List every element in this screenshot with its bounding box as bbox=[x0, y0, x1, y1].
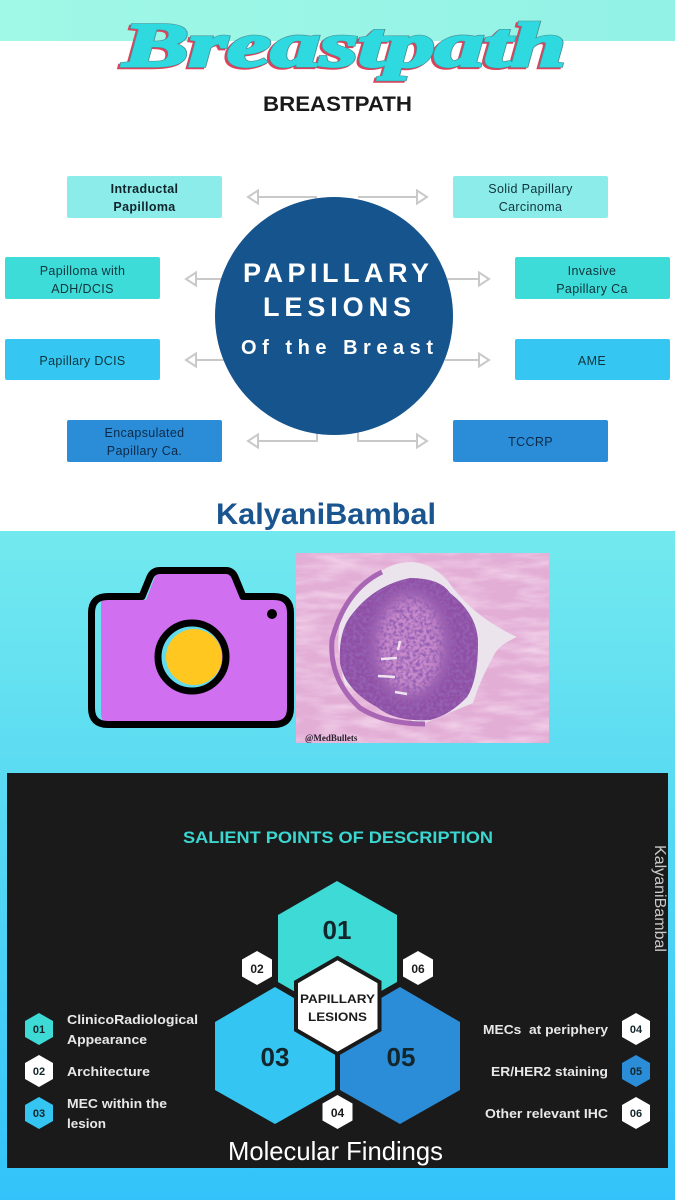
legend item 06: Other relevant IHC bbox=[485, 1106, 609, 1121]
legend item 03: MEC within the bbox=[67, 1096, 167, 1111]
legend item 04 bbox=[483, 1013, 650, 1045]
legend item 06: 06 bbox=[630, 1108, 642, 1120]
legend item 01: ClinicoRadiological bbox=[67, 1012, 198, 1027]
icon: camera bbox=[92, 570, 291, 725]
small hexagon 04 bbox=[322, 1095, 352, 1129]
legend left bbox=[25, 1012, 198, 1131]
small hexagon 06: 06 bbox=[411, 962, 425, 976]
subtitle: BREASTPATH bbox=[263, 93, 412, 116]
legend item 04: MECs at periphery bbox=[483, 1022, 609, 1037]
image credit: @MedBullets bbox=[305, 733, 358, 743]
hexagon 01: 01 bbox=[323, 915, 351, 945]
tumour bbox=[340, 578, 478, 720]
legend item 03: lesion bbox=[67, 1116, 106, 1131]
central circle: LESIONS bbox=[263, 292, 411, 322]
title: Breastpath script logo: Breastpath bbox=[122, 12, 566, 80]
box: Encapsulated Papillary Ca.: Encapsulated bbox=[105, 426, 184, 440]
title: Breastpath script logo: Breastpath bbox=[120, 13, 564, 82]
legend item 01 bbox=[25, 1012, 198, 1047]
hexagon 05: 05 bbox=[387, 1042, 415, 1072]
author name: KalyaniBambal bbox=[216, 498, 436, 531]
central circle: PAPILLARY bbox=[243, 258, 429, 288]
legend right bbox=[483, 1013, 650, 1129]
box: Invasive Papillary Ca bbox=[515, 257, 670, 299]
box: Solid Papillary Carcinoma bbox=[453, 176, 608, 218]
molecular findings caption: Molecular Findings bbox=[228, 1136, 443, 1166]
center hexagon: PAPILLARY bbox=[300, 992, 375, 1006]
diagram: papillary lesions bbox=[5, 176, 670, 462]
box: Intraductal Papilloma: Papilloma bbox=[113, 200, 176, 214]
box: Encapsulated Papillary Ca.: Papillary Ca. bbox=[107, 444, 182, 458]
central circle bbox=[215, 197, 453, 435]
center hexagon: LESIONS bbox=[308, 1010, 367, 1024]
histology image bbox=[296, 553, 549, 743]
box: Intraductal Papilloma: Intraductal bbox=[111, 182, 178, 196]
box: Invasive Papillary Ca: Invasive bbox=[568, 264, 616, 278]
legend item 04: 04 bbox=[630, 1024, 643, 1036]
legend item 05 bbox=[491, 1055, 650, 1087]
box: TCCRP bbox=[453, 420, 608, 462]
box: TCCRP: TCCRP bbox=[508, 435, 553, 449]
central circle: Of the Breast bbox=[241, 337, 433, 359]
box: Solid Papillary Carcinoma: Carcinoma bbox=[499, 200, 562, 214]
vertical author label: KalyaniBambal bbox=[651, 845, 668, 952]
box: Papilloma with ADH/DCIS: ADH/DCIS bbox=[51, 282, 114, 296]
legend item 01: Appearance bbox=[67, 1032, 147, 1047]
hexagon 05 bbox=[340, 987, 460, 1124]
box: Papilloma with ADH/DCIS bbox=[5, 257, 160, 299]
box: Papillary DCIS bbox=[5, 339, 160, 380]
box: Intraductal Papilloma bbox=[67, 176, 222, 218]
small hexagon 02: 02 bbox=[250, 962, 264, 976]
hexagon diagram bbox=[215, 881, 460, 1129]
panel heading: SALIENT POINTS OF DESCRIPTION bbox=[183, 828, 493, 847]
legend item 05: ER/HER2 staining bbox=[491, 1064, 608, 1079]
panel: salient points bbox=[7, 773, 668, 1168]
hexagon 01 bbox=[278, 881, 397, 1016]
box: Papillary DCIS: Papillary DCIS bbox=[39, 354, 126, 368]
epithelial rim bbox=[332, 572, 425, 724]
legend item 02: Architecture bbox=[67, 1064, 150, 1079]
legend item 05: 05 bbox=[630, 1066, 642, 1078]
arrows bbox=[186, 190, 489, 448]
hexagon 03 bbox=[215, 987, 335, 1124]
center hexagon bbox=[296, 958, 380, 1054]
box: Encapsulated Papillary Ca. bbox=[67, 420, 222, 462]
small hexagon 04: 04 bbox=[331, 1106, 344, 1120]
title: Breastpath script logo: Breastpath bbox=[122, 12, 566, 80]
box: AME bbox=[515, 339, 670, 380]
legend item 02: 02 bbox=[33, 1066, 45, 1078]
box: AME: AME bbox=[578, 354, 606, 368]
lumen bbox=[338, 562, 517, 725]
box: Papilloma with ADH/DCIS: Papilloma with bbox=[40, 264, 125, 278]
hexagon 03: 03 bbox=[261, 1042, 289, 1072]
box: Invasive Papillary Ca: Papillary Ca bbox=[556, 282, 628, 296]
legend item 03 bbox=[25, 1096, 167, 1131]
legend item 06 bbox=[485, 1097, 650, 1129]
legend item 01: 01 bbox=[33, 1024, 45, 1036]
legend item 02 bbox=[25, 1055, 150, 1087]
small hexagon 06 bbox=[403, 951, 433, 985]
small hexagon 02 bbox=[242, 951, 272, 985]
box: Solid Papillary Carcinoma: Solid Papillary bbox=[488, 182, 573, 196]
legend item 03: 03 bbox=[33, 1108, 45, 1120]
